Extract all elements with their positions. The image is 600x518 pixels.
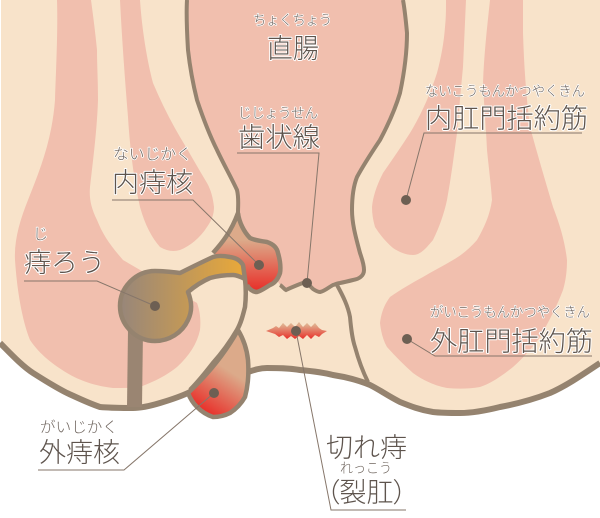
label: anal fissure (291, 326, 407, 510)
label: rectum: ちょくちょう (253, 12, 332, 28)
label: external anal sphincter (402, 304, 593, 357)
label: dentate line (237, 105, 320, 288)
icon: fistula (120, 256, 245, 407)
internal hemorrhoid outline (213, 213, 280, 292)
label: internal anal sphincter: 内肛門括約筋 (425, 104, 588, 134)
label: anal fissure: （裂肛） (326, 478, 407, 508)
icon: anal fissure (266, 322, 327, 339)
icon: external hemorrhoid (188, 330, 248, 417)
label: fistula: じ (33, 226, 48, 243)
label: fistula (24, 226, 160, 311)
label: internal anal sphincter: ないこうもんかつやくきん (425, 83, 585, 99)
label: rectum: 直腸 (267, 34, 319, 64)
label: external hemorrhoid: 外痔核 (39, 438, 120, 468)
icon: internal hemorrhoid (213, 213, 280, 292)
panel: muscle outer right (380, 0, 567, 389)
panel: muscle inner right (372, 0, 466, 255)
label: internal anal sphincter (401, 83, 588, 205)
label: external anal sphincter: がいこうもんかつやくきん (430, 304, 590, 320)
fistula stem (127, 330, 143, 407)
rectum wall outline (187, 0, 238, 213)
body outline (0, 343, 600, 413)
label: dentate line: じじょうせん (238, 105, 318, 121)
panel: muscle inner left (120, 0, 214, 251)
panel: rectum (187, 0, 407, 293)
label: anal fissure: れっこう (340, 460, 392, 476)
label: anal fissure: 切れ痔 (326, 433, 407, 463)
panel: muscle outer left (15, 0, 200, 388)
label: external hemorrhoid (38, 388, 219, 470)
fistula pocket and tract (120, 256, 245, 341)
panel: body tissue (1, 0, 600, 413)
label: fistula: 痔ろう (24, 248, 105, 278)
label: rectum (253, 12, 332, 64)
label: internal hemorrhoid: ないじかく (113, 146, 192, 163)
inner curve between fistula and external hemorrhoid (190, 279, 246, 390)
label: internal hemorrhoid (112, 146, 264, 270)
rectum right wall and dentate edge (280, 0, 407, 292)
anal canal right wall (337, 285, 368, 382)
label: internal hemorrhoid: 内痔核 (112, 168, 193, 198)
label: external hemorrhoid: がいじかく (40, 419, 118, 436)
label: external anal sphincter: 外肛門括約筋 (430, 327, 593, 357)
label: dentate line: 歯状線 (238, 123, 320, 153)
